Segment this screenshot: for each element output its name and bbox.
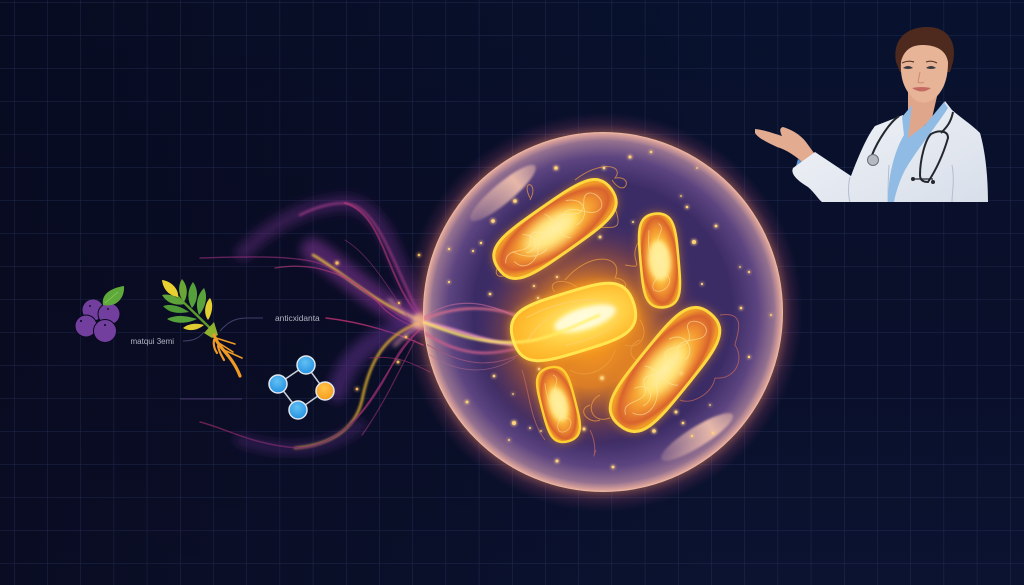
bacterium upper right xyxy=(636,212,683,309)
bacterium bottom right xyxy=(599,297,731,442)
blue shirt xyxy=(888,102,948,202)
energy streams flowing into the sphere xyxy=(200,203,430,448)
icon: molecule xyxy=(269,356,334,419)
label: antioxidants xyxy=(220,313,320,331)
glass highlight bottom right xyxy=(656,406,738,468)
stethoscope xyxy=(872,112,953,182)
doctor presenter xyxy=(755,27,988,202)
mouth xyxy=(912,87,931,92)
lab coat xyxy=(792,101,988,202)
stethoscope chest piece xyxy=(868,154,878,166)
warm core glow xyxy=(475,220,705,450)
hair back xyxy=(895,27,954,72)
bacterium upper left xyxy=(484,169,626,289)
stray flagella xyxy=(496,167,739,456)
bacterium centre, brightest xyxy=(504,275,643,369)
icon: purple berries with leaf xyxy=(75,286,124,342)
label: matqui 3emi: matqui 3emi xyxy=(130,337,174,346)
streams inside the sphere xyxy=(423,303,530,370)
neck xyxy=(908,90,938,142)
coat folds xyxy=(848,165,953,202)
label: antioxidants: anticxidanta xyxy=(275,313,320,323)
shirt cuff xyxy=(796,159,806,171)
label: matqui 3emi xyxy=(130,332,204,346)
eyes xyxy=(902,61,937,69)
sphere outer glow xyxy=(403,112,803,512)
leader line xyxy=(180,398,242,400)
cell sphere with bacteria xyxy=(423,132,783,492)
hand xyxy=(755,127,814,163)
face xyxy=(901,45,948,103)
glowing particles outside the sphere xyxy=(335,254,420,390)
sphere body xyxy=(423,132,783,492)
yellow stream into centre bacterium xyxy=(423,315,600,342)
icon: herb plant with orange root xyxy=(162,279,242,376)
glowing particles inside the sphere xyxy=(448,151,772,468)
root xyxy=(214,335,242,376)
nose xyxy=(918,72,924,83)
glass highlight top left xyxy=(464,158,542,228)
bacterium bottom left xyxy=(533,363,584,446)
